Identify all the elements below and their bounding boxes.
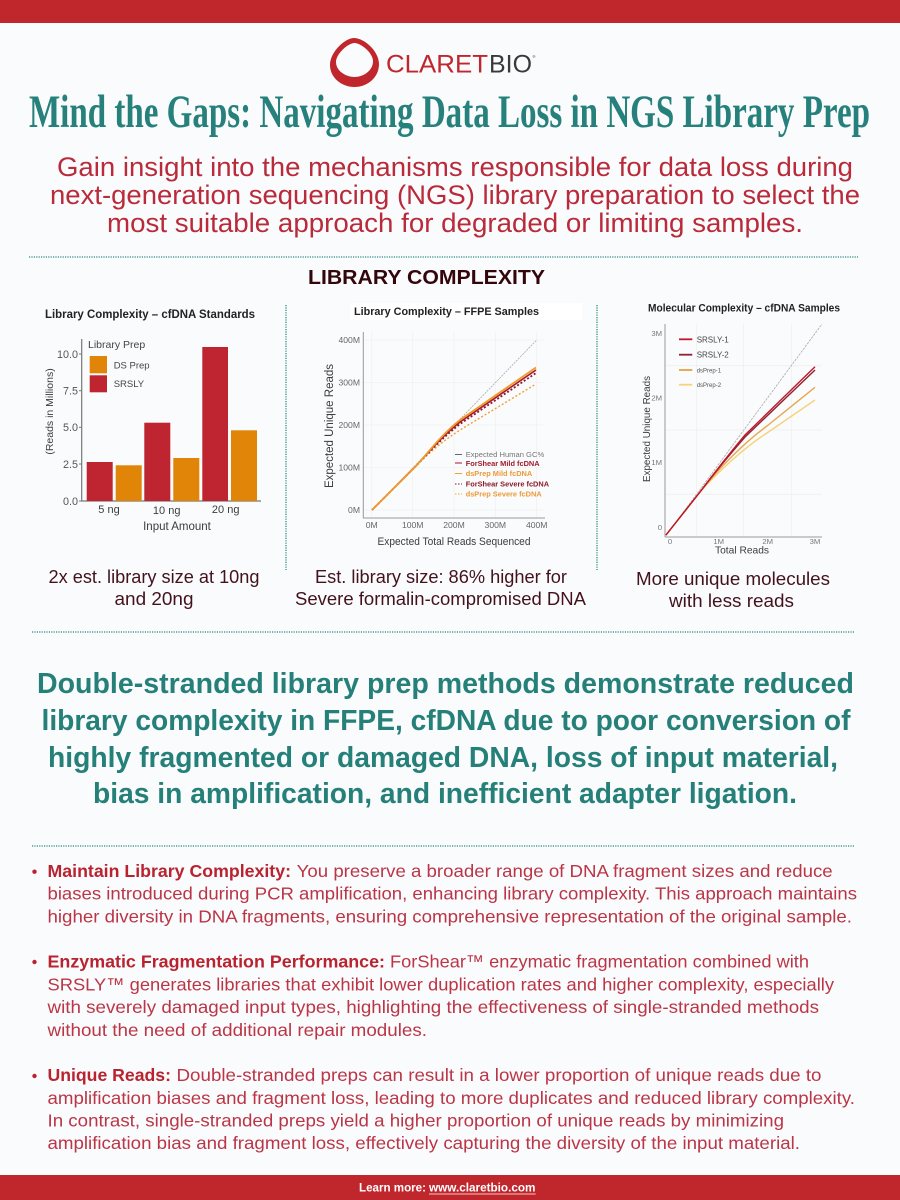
bar chart: Input Amount [143,521,212,533]
chart legend: ForShear Mild fcDNA [466,459,540,468]
line chart: 300M [338,378,360,388]
line chart: 1M [651,458,662,467]
footer banner [0,1175,900,1200]
bullet: enzymatic fragmentation performance: without the need of additional repair modules. [46,1020,427,1040]
caption: cfDNA samples: More unique molecules [636,569,830,589]
section heading: library complexity: LIBRARY COMPLEXITY [308,267,546,289]
bullet: unique reads: amplification bias and fragment loss, effectively capturing the diversity of the input material. [48,1133,800,1153]
panel: cfDNA samples line chart [641,303,840,557]
bullet: enzymatic fragmentation performance: with severely damaged input types, highlighting the effectiveness of single-stranded methods [46,997,819,1017]
bullet: maintain library complexity: You preserve a broader range of DNA fragment sizes and reduce [297,861,833,881]
line chart: 200M [443,520,465,530]
intro text [50,152,860,238]
intro text: most suitable approach for degraded or limiting samples. [107,208,803,238]
line chart: 2M [762,537,773,546]
logo: ClaretBio [330,38,536,87]
logo wordmark [386,50,536,78]
caption: cfDNA samples: with less reads [668,591,794,611]
bullet: maintain library complexity: biases introduced during PCR amplification, enhancing library complexity. This approach maintains [48,884,857,904]
panel: cfDNA standards bar chart [44,309,261,533]
bullet: unique reads: Unique Reads: [48,1065,171,1085]
bullet: unique reads: Double-stranded preps can result in a lower proportion of unique reads due to [176,1065,822,1085]
line chart: Total Reads [715,545,769,557]
chart legend [679,335,729,389]
chart legend: dsPrep Mild fcDNA [466,469,533,478]
caption: cfDNA samples [636,569,830,611]
chart legend [455,450,550,498]
caption: cfDNA standards [48,567,260,609]
bullet: enzymatic fragmentation performance: ForShear™ enzymatic fragmentation combined with [390,952,809,972]
bar chart: 10 ng [153,505,180,517]
line chart: 400M [338,335,360,345]
bullet: unique reads: In contrast, single-stranded preps yield a higher proportion of unique reads by minimizing [48,1111,784,1131]
bar chart: 2.5 [63,459,78,471]
caption: cfDNA standards: 2x est. library size at 10ng [48,567,260,587]
line chart [641,324,822,557]
line chart: 400M [526,520,547,530]
key message: library complexity in FFPE, cfDNA due to poor conversion of [42,705,851,737]
bar chart: 10.0 [57,349,78,361]
chart legend: Expected Human GC% [466,450,544,459]
chart legend: Library Prep [88,339,145,351]
bar chart: 5.0 [63,422,78,434]
bar chart: 7.5 [63,386,78,398]
chart legend: ForShear Severe fcDNA [466,480,550,489]
chart legend [88,339,150,392]
bullet: enzymatic fragmentation performance [32,952,834,1040]
chart legend: dsPrep-2 [697,383,722,389]
chart legend: SRSLY-2 [697,351,729,360]
chart legend: dsPrep-1 [697,368,722,374]
key message: highly fragmented or damaged DNA, loss of input material, [48,742,838,774]
logo wordmark: CLARET [386,50,488,78]
intro text: next-generation sequencing (NGS) library preparation to select the [50,180,860,210]
bullet: unique reads [32,1065,855,1153]
line chart: 3M [810,537,820,546]
line chart: 3M [651,329,662,338]
key message: Double-stranded library prep methods demonstrate reduced [37,668,854,700]
chart legend: dsPrep Severe fcDNA [466,489,542,498]
chart legend: SRSLY [114,379,145,390]
line chart [324,332,547,548]
logo wordmark: ® [532,54,536,59]
bullet: maintain library complexity: higher diversity in DNA fragments, ensuring comprehensive representation of the original sample. [48,906,852,926]
line chart: 300M [485,520,506,530]
line chart: 0 [668,537,672,546]
bullet: unique reads: amplification biases and fragment loss, leading to more duplicates and reduced library complexity. [48,1088,855,1108]
bar chart: 20 ng [212,504,239,516]
caption: FFPE samples: Severe formalin-compromised DNA [295,589,586,609]
intro text: Gain insight into the mechanisms responsible for data loss during [57,152,853,182]
bar chart: 0.0 [63,496,78,508]
line chart: Expected Unique Reads [641,376,653,482]
icon: logo ring [330,38,379,87]
caption: cfDNA standards: and 20ng [114,589,194,609]
line chart: 200M [338,420,360,430]
footer link text: Learn more: [359,1182,426,1194]
caption: FFPE samples [295,567,586,609]
line chart: 0M [366,520,378,530]
chart legend: SRSLY-1 [697,335,729,344]
logo wordmark: BIO [489,50,532,78]
footer link text: www.claretbio.com [428,1182,536,1194]
chart legend: DS Prep [114,361,150,372]
bullet: maintain library complexity: Maintain Library Complexity: [48,861,291,881]
line chart: Expected Total Reads Sequenced [378,536,530,548]
bar chart: 5 ng [98,504,120,516]
line chart: 1M [713,537,724,546]
caption: FFPE samples: Est. library size: 86% higher for [315,567,567,587]
line chart: 0M [348,505,360,515]
panel: FFPE samples line chart [324,303,582,548]
chart heading: Library Complexity – cfDNA Standards [45,309,255,321]
bullet: maintain library complexity [32,861,857,926]
key message [37,668,854,810]
bullet: enzymatic fragmentation performance: Enzymatic Fragmentation Performance: [48,952,385,972]
key message: bias in amplification, and inefficient adapter ligation. [93,778,797,810]
bar chart [44,339,261,533]
bar chart: (Reads in Millions) [44,368,56,455]
top banner [0,0,900,23]
line chart: 2M [651,394,662,402]
line chart: 0 [658,523,662,532]
line chart: 100M [402,520,423,530]
line chart: 100M [338,462,360,472]
footer link text [359,1182,536,1194]
bullet: enzymatic fragmentation performance: SRSLY™ generates libraries that exhibit lower duplication rates and higher complexity, especially [48,974,834,994]
chart heading: Library Complexity – FFPE Samples [354,306,539,318]
chart heading: Molecular Complexity – cfDNA Samples [648,303,840,315]
line chart: Expected Unique Reads [324,364,336,488]
